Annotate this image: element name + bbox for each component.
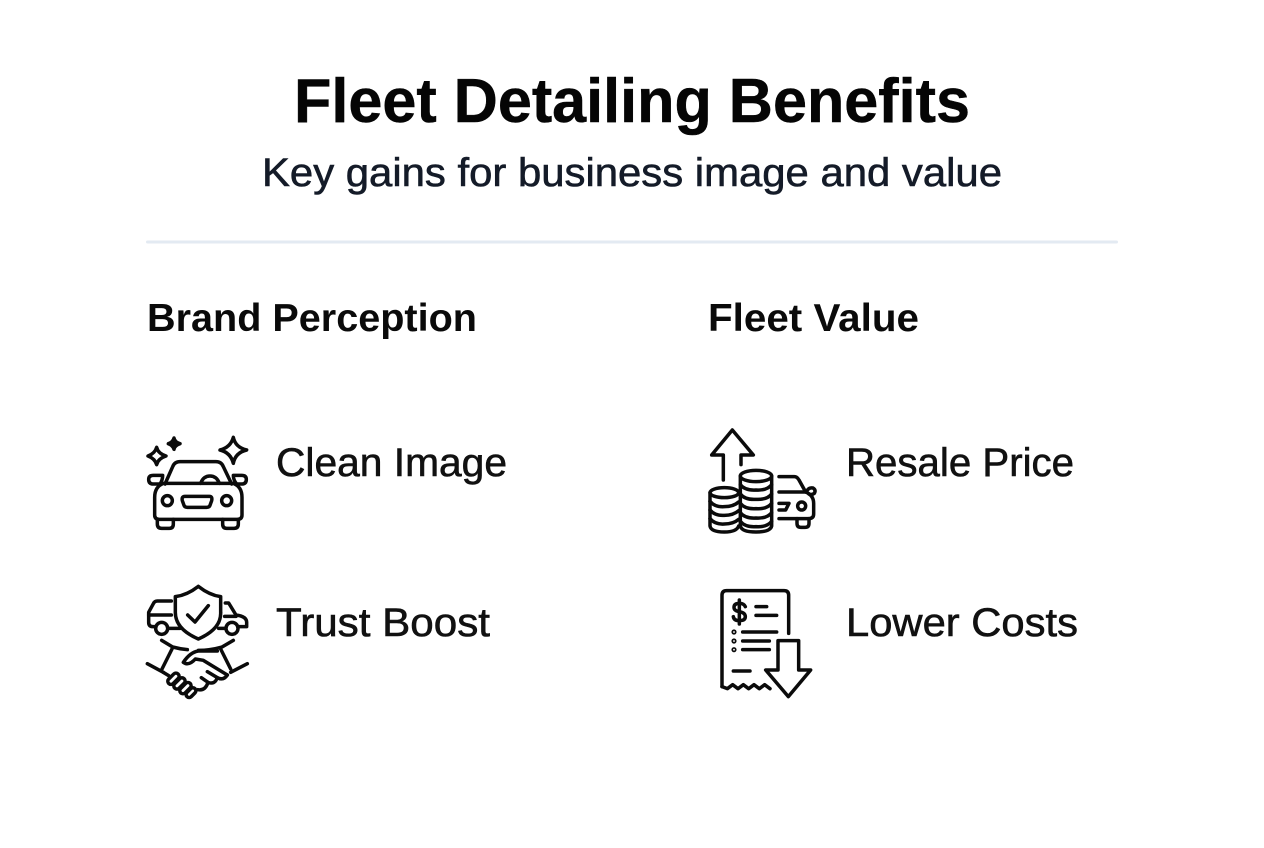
icon: receipt with down arrow — [722, 591, 811, 697]
label: clean image: Clean Image — [276, 441, 507, 485]
icon: trust shield with vehicles and handshake — [147, 586, 247, 699]
panel: brand perception — [147, 297, 507, 699]
heading: fleet value: Fleet Value — [708, 297, 919, 340]
title: Fleet Detailing Benefits — [294, 67, 970, 136]
heading: brand perception: Brand Perception — [147, 297, 477, 340]
icon: clean car with sparkles — [148, 437, 247, 528]
label: lower costs: Lower Costs — [846, 601, 1078, 645]
icon: rising arrow, coins and car — [710, 430, 815, 532]
label: trust boost: Trust Boost — [276, 601, 490, 645]
panel: fleet value — [708, 297, 1078, 697]
subtitle: Key gains for business image and value — [262, 151, 1002, 195]
label: resale price: Resale Price — [846, 441, 1074, 485]
